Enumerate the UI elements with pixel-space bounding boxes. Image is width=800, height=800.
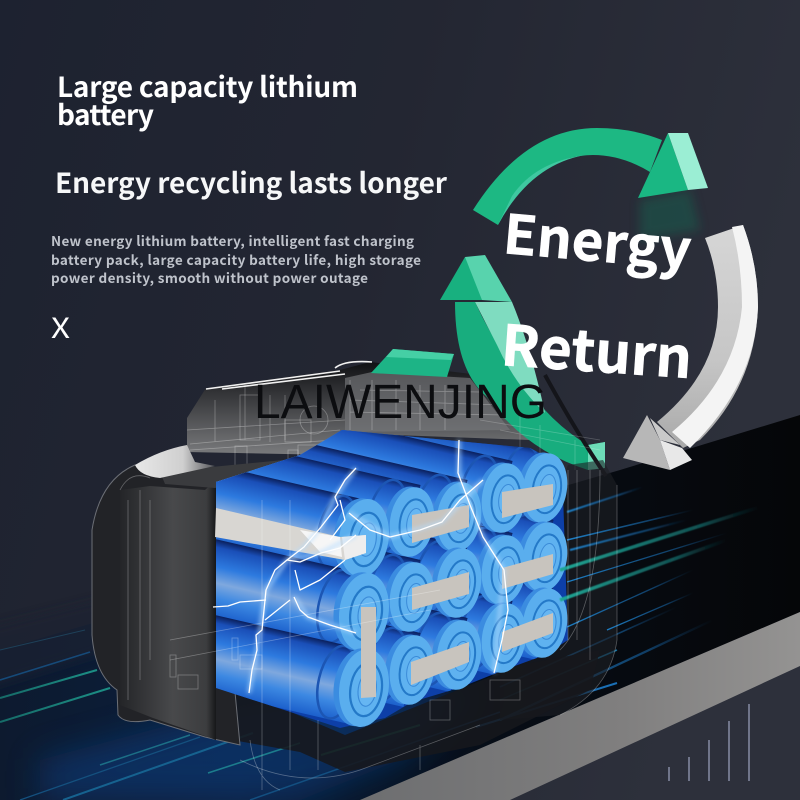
lower handle edge — [160, 455, 342, 488]
heading — [57, 66, 358, 134]
top bus bar — [215, 508, 366, 560]
label: Return: Return — [499, 301, 695, 395]
heading: Large capacity lithium — [57, 66, 358, 106]
lithium cells — [216, 430, 568, 728]
floor blue glow — [40, 690, 480, 800]
subheading: Energy recycling lasts longer — [55, 162, 448, 202]
label: Energy: Energy — [501, 190, 695, 285]
description text — [51, 230, 421, 287]
arrow: green top — [473, 128, 708, 240]
X mark: X — [51, 307, 70, 347]
right housing — [500, 460, 617, 720]
arrow: green lower left — [440, 255, 606, 476]
shoulder highlight — [135, 445, 215, 478]
heading: battery — [57, 94, 154, 134]
housing body — [120, 480, 216, 740]
lightning — [213, 440, 508, 693]
floor speed streaks — [0, 607, 713, 800]
description text: power density, smooth without power outage — [51, 267, 368, 287]
battery pack — [92, 430, 751, 790]
arrow: white right — [623, 225, 758, 470]
housing outline left — [92, 465, 240, 745]
description text: battery pack, large capacity battery life, high storage — [51, 249, 421, 269]
top-left floor fade — [0, 600, 110, 690]
cell end faces — [329, 450, 572, 730]
grey platform edge — [360, 612, 800, 800]
lower housing shadow — [215, 650, 600, 772]
battery handle — [187, 349, 530, 470]
description text: New energy lithium battery, intelligent fast charging — [51, 230, 414, 250]
dark floor surface — [0, 415, 800, 800]
metal strips — [361, 484, 553, 698]
signal bars — [668, 704, 750, 781]
handle wire detail — [187, 380, 505, 470]
floor streaks through housing — [560, 487, 760, 630]
watermark: LAIWENJING — [254, 376, 547, 429]
green tab — [371, 349, 454, 377]
wireframe overlay — [120, 470, 617, 790]
